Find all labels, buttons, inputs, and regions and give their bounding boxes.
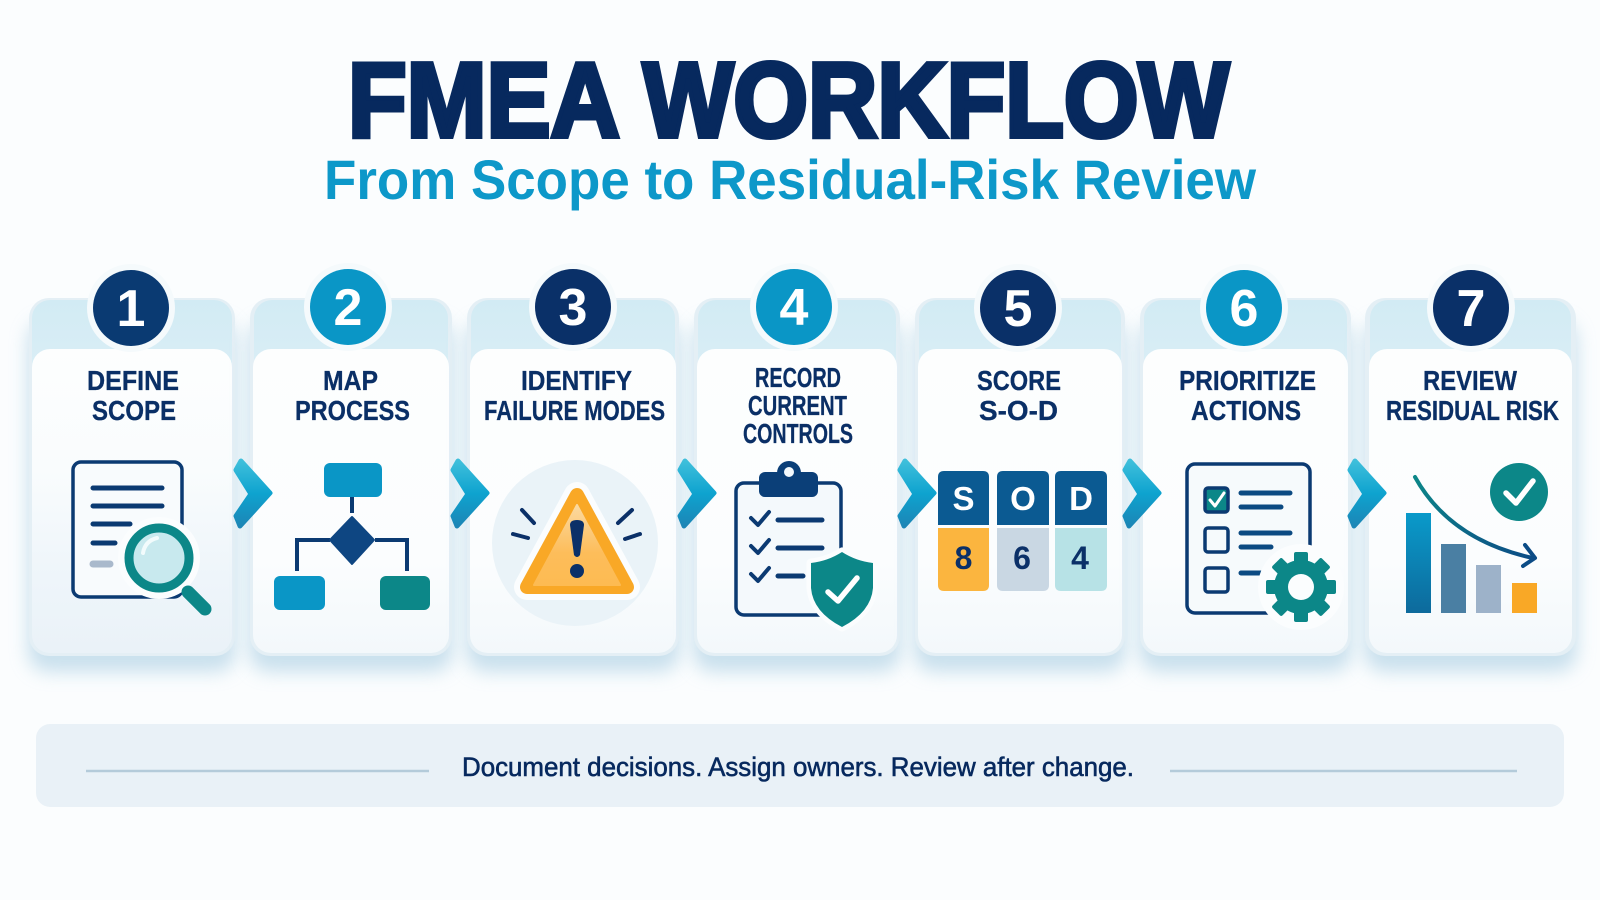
arrow 1 bbox=[236, 461, 270, 526]
step label: ACTIONS bbox=[1191, 395, 1301, 426]
step number 1: 1 bbox=[117, 280, 145, 338]
arrow 4 bbox=[900, 461, 934, 526]
step number 4 bbox=[750, 263, 838, 351]
icon: S O D score grid: D bbox=[1069, 480, 1093, 517]
icon: S O D score grid: 8 bbox=[955, 540, 972, 576]
icon: checklist with gear bbox=[1187, 464, 1344, 630]
icon: falling risk bar chart bbox=[1406, 463, 1548, 613]
icon: S O D score grid bbox=[938, 471, 1107, 591]
arrow 3 bbox=[680, 461, 714, 526]
panel: step 4 record current controls bbox=[693, 263, 901, 672]
icon: S O D score grid: 6 bbox=[1013, 540, 1031, 576]
step label bbox=[87, 365, 179, 426]
step label bbox=[295, 365, 410, 426]
step label: S-O-D bbox=[979, 395, 1058, 426]
icon: process flowchart bbox=[274, 463, 430, 610]
step label: FAILURE MODES bbox=[484, 395, 665, 426]
step label: MAP bbox=[323, 365, 378, 396]
step number 3 bbox=[529, 263, 617, 351]
panel: step 7 review residual risk bbox=[1364, 264, 1577, 672]
step label: PRIORITIZE bbox=[1179, 365, 1316, 396]
step number 5: 5 bbox=[1004, 280, 1032, 338]
step label: SCORE bbox=[977, 365, 1061, 396]
step label bbox=[484, 365, 665, 426]
step label: RECORD bbox=[755, 362, 841, 393]
step number 6: 6 bbox=[1230, 280, 1258, 338]
step number 2 bbox=[304, 263, 392, 351]
arrow 6 bbox=[1350, 461, 1384, 526]
icon: S O D score grid: 4 bbox=[1071, 540, 1089, 576]
step number 3: 3 bbox=[559, 279, 587, 337]
panel: step 5 score S-O-D bbox=[914, 264, 1126, 672]
step number 6 bbox=[1200, 264, 1288, 352]
step label: IDENTIFY bbox=[521, 365, 632, 396]
panel: step 2 map process bbox=[249, 263, 453, 672]
icon: warning triangle bbox=[492, 460, 658, 626]
step label bbox=[977, 365, 1061, 426]
icon: S O D score grid: S bbox=[952, 480, 975, 517]
icon: clipboard with shield bbox=[736, 461, 873, 627]
step label: PROCESS bbox=[295, 395, 410, 426]
panel: step 1 define scope bbox=[28, 264, 236, 672]
panel: step 6 prioritize actions bbox=[1139, 264, 1352, 672]
footer banner bbox=[36, 724, 1564, 807]
arrow 2 bbox=[453, 461, 487, 526]
step number 7: 7 bbox=[1457, 280, 1485, 338]
step label: RESIDUAL RISK bbox=[1386, 395, 1559, 426]
step number 5 bbox=[974, 264, 1062, 352]
panel: step 3 identify failure modes bbox=[466, 263, 680, 672]
subtitle: From Scope to Residual-Risk Review bbox=[324, 148, 1256, 211]
step number 7 bbox=[1427, 264, 1515, 352]
icon: document with magnifier bbox=[73, 462, 205, 609]
step number 4: 4 bbox=[780, 279, 809, 337]
step label: CURRENT bbox=[748, 390, 847, 421]
footer text: Document decisions. Assign owners. Review after change. bbox=[462, 752, 1134, 782]
step number 2: 2 bbox=[334, 279, 362, 337]
step label: SCOPE bbox=[92, 395, 176, 426]
arrow 5 bbox=[1125, 461, 1159, 526]
step label bbox=[743, 362, 853, 449]
step label: CONTROLS bbox=[743, 418, 853, 449]
step label bbox=[1179, 365, 1316, 426]
step number 1 bbox=[87, 264, 175, 352]
step label: REVIEW bbox=[1423, 365, 1517, 396]
step label: DEFINE bbox=[87, 365, 179, 396]
step label bbox=[1386, 365, 1559, 426]
title: FMEA WORKFLOW bbox=[348, 42, 1229, 160]
icon: S O D score grid: O bbox=[1010, 480, 1036, 517]
